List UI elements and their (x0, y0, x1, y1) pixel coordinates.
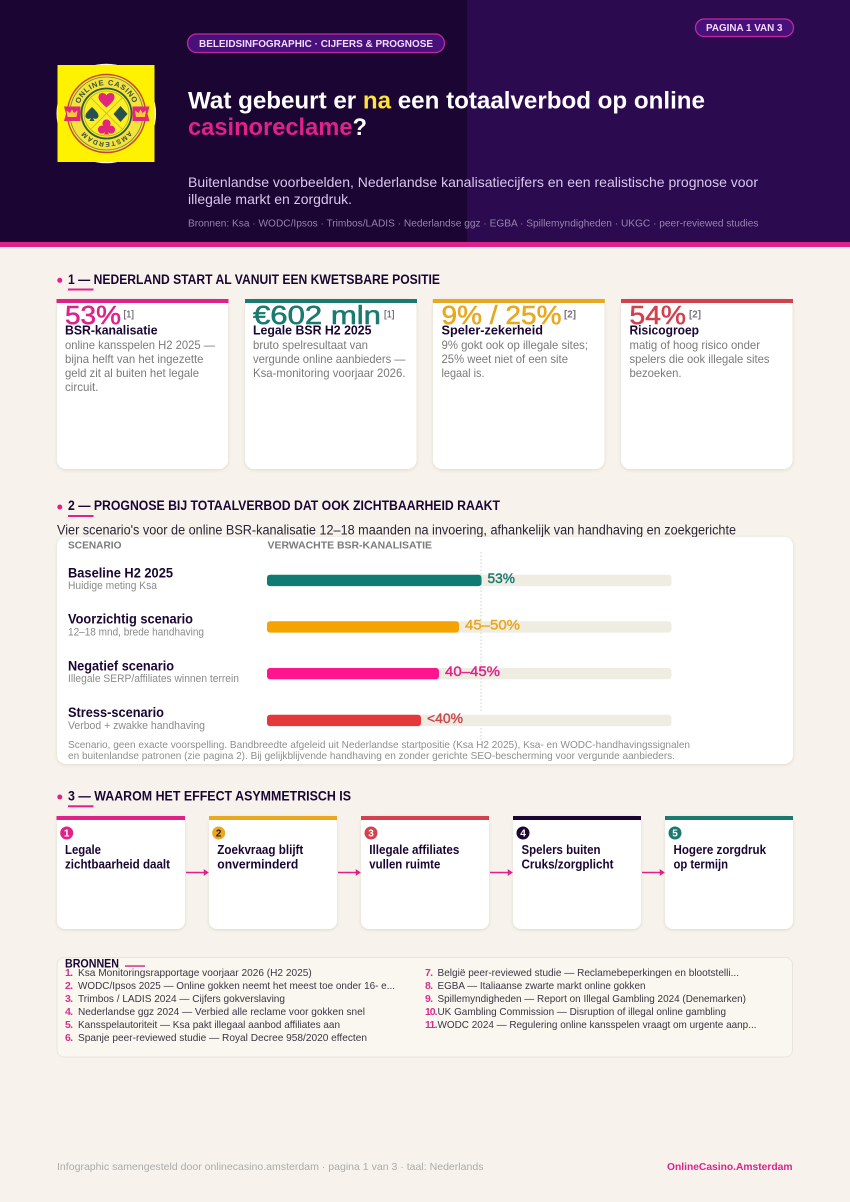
subtitle (188, 174, 758, 207)
step 1: Legale (65, 842, 101, 857)
row: stress: <40% (427, 711, 463, 726)
row: baseline: Baseline H2 2025 (68, 565, 173, 580)
step 3: Illegale affiliates (369, 842, 459, 857)
row: voorzichtig (68, 612, 520, 638)
row: voorzichtig: 45–50% (465, 617, 520, 632)
step 3: 3 (368, 829, 374, 840)
row: baseline: Huidige meting Ksa (68, 580, 158, 592)
step 4: 4 (520, 829, 526, 840)
footer: Infographic samengesteld door onlinecasino.amsterdam · pagina 1 van 3 · taal: Nederlands (57, 1161, 484, 1173)
card: €602 mln: Ksa-monitoring voorjaar 2026. (253, 366, 406, 380)
bronnen list right: 7. (425, 967, 433, 979)
card: 53% (56, 299, 228, 469)
bronnen list left: 1. (65, 967, 73, 979)
bronnen list left: 4. (65, 1006, 73, 1018)
card: 54%: 54% (630, 300, 686, 330)
step 4 (513, 816, 641, 929)
bronnen list right: WODC 2024 — Regulering online kansspelen vraagt om urgente aanp... (438, 1019, 756, 1031)
subtitle: Buitenlandse voorbeelden, Nederlandse kanalisatiecijfers en een realistische prognose voor (188, 174, 758, 190)
card: 53%: 53% (65, 300, 121, 330)
step 5 (665, 816, 793, 929)
bronnen list left: WODC/Ipsos 2025 — Online gokken neemt het meest toe onder 16- e... (78, 980, 395, 992)
bronnen list left: Ksa Monitoringsrapportage voorjaar 2026 (H2 2025) (78, 967, 312, 979)
arrow: 2 to 3 (338, 870, 360, 874)
row: stress: Verbod + zwakke handhaving (68, 720, 205, 732)
tag: pagina 1 van 3 (696, 19, 794, 36)
step 2: 2 (216, 829, 222, 840)
card: 9% / 25% (433, 299, 605, 469)
footer (57, 1161, 792, 1173)
card: 54%: matig of hoog risico onder (630, 338, 760, 352)
card: 54% (621, 299, 793, 469)
row: voorzichtig: Voorzichtig scenario (68, 612, 193, 626)
card: 53%: [1] (124, 310, 134, 320)
panel: scenario bar chart (57, 537, 793, 764)
bronnen list right (425, 967, 756, 1031)
logo: online casino amsterdam: ONLINE CASINO (76, 80, 137, 103)
row: voorzichtig: 12–18 mnd, brede handhaving (68, 626, 204, 638)
step 2: onverminderd (217, 857, 298, 872)
card: €602 mln: Legale BSR H2 2025 (253, 322, 372, 338)
bronnen list left: 3. (65, 993, 73, 1005)
step 3: vullen ruimte (369, 857, 440, 872)
card: €602 mln: bruto spelresultaat van (253, 338, 368, 352)
bronnen list left: Nederlandse ggz 2024 — Verbied alle reclame voor gokken snel (78, 1006, 365, 1018)
card: 9% / 25%: Speler-zekerheid (442, 322, 543, 338)
bronnen list right: EGBA — Italiaanse zwarte markt online gokken (438, 980, 646, 992)
panel: bronnen (57, 956, 792, 1057)
step 3 (361, 816, 489, 929)
bronnen list right: UK Gambling Commission — Disruption of illegal online gambling (438, 1006, 726, 1018)
card: 53%: bijna helft van het ingezette (65, 352, 204, 366)
step 4: Cruks/zorgplicht (522, 857, 614, 872)
bronnen list left: 5. (65, 1019, 73, 1031)
subtitle: illegale markt en zorgdruk. (188, 191, 352, 207)
header banner (0, 0, 850, 247)
card: 9% / 25%: 9% gokt ook op illegale sites; (442, 338, 588, 352)
bronnen heading: BRONNEN (65, 956, 119, 970)
step 4: Spelers buiten (522, 842, 601, 857)
sources line: Bronnen: Ksa · WODC/Ipsos · Trimbos/LADIS · Nederlandse ggz · EGBA · Spillemyndigheden · UKGC · peer-reviewed studies (188, 218, 758, 230)
bronnen list right: 11. (425, 1019, 438, 1031)
heading: section 3: 3 — WAAROM HET EFFECT ASYMMETRISCH IS (68, 788, 351, 804)
icon: club (98, 119, 115, 134)
card: 53%: BSR-kanalisatie (65, 322, 158, 338)
step 1 (56, 816, 185, 929)
row: negatief: Illegale SERP/affiliates winnen terrein (68, 673, 239, 685)
chart column headers (68, 539, 432, 551)
card: 9% / 25%: legaal is. (442, 366, 484, 380)
bronnen list left: Spanje peer-reviewed studie — Royal Decree 958/2020 effecten (78, 1032, 367, 1044)
card: 54%: Risicogroep (630, 322, 699, 338)
bronnen list left (65, 967, 395, 1044)
row: baseline (68, 565, 515, 592)
step 2 (209, 816, 337, 929)
bronnen list left: Kansspelautoriteit — Ksa pakt illegaal aanbod affiliates aan (78, 1019, 340, 1031)
title (188, 88, 705, 141)
chart column headers: SCENARIO (68, 539, 122, 551)
chart footnote: en buitenlandse patronen (zie pagina 2). Bij gelijkblijvende handhaving en zonder gerichte SEO-bescherming voor vergunde aanbieders. (68, 750, 675, 762)
card: 54%: bezoeken. (630, 366, 682, 380)
tag: pagina 1 van 3: PAGINA 1 VAN 3 (706, 22, 783, 34)
row: stress (68, 705, 463, 732)
heading: section 1: 1 — NEDERLAND START AL VANUIT EEN KWETSBARE POSITIE (68, 272, 440, 287)
step 5: Hogere zorgdruk (674, 842, 767, 857)
row: baseline: 53% (488, 571, 515, 586)
panel: stat cards (56, 299, 793, 469)
card: €602 mln (245, 299, 417, 469)
title: Wat gebeurt er na een totaalverbod op online (188, 88, 705, 114)
arrow: 1 to 2 (186, 870, 208, 874)
logo: online casino amsterdam: AMSTERDAM (81, 131, 132, 147)
bronnen list left: 2. (65, 980, 73, 992)
card: €602 mln: vergunde online aanbieders — (253, 352, 406, 366)
card: 54%: spelers die ook illegale sites (630, 352, 770, 366)
step 2: Zoekvraag blijft (217, 842, 304, 857)
card: €602 mln: €602 mln (253, 300, 381, 330)
tag: beleidsinfographic (188, 34, 444, 52)
chart column headers: VERWACHTE BSR-KANALISATIE (268, 539, 432, 551)
row: negatief: 40–45% (445, 664, 500, 679)
card: 9% / 25%: 9% / 25% (442, 300, 562, 330)
step 1: 1 (64, 829, 70, 840)
chart footnote (68, 739, 690, 762)
panel: causal chain (56, 816, 793, 929)
row: negatief: Negatief scenario (68, 658, 174, 673)
icon: spade (86, 107, 98, 121)
step 5: 5 (672, 829, 678, 840)
bronnen list left: Trimbos / LADIS 2024 — Cijfers gokverslaving (78, 993, 285, 1005)
bronnen list left: 6. (65, 1032, 73, 1044)
bronnen list right: 9. (425, 993, 433, 1005)
chart footnote: Scenario, geen exacte voorspelling. Bandbreedte afgeleid uit Nederlandse startpositie (Ksa H2 2025), Ksa- en WODC-handhavingssignalen (68, 739, 690, 751)
card: 53%: online kansspelen H2 2025 — (65, 338, 215, 352)
card: 9% / 25%: 25% weet niet of een site (442, 352, 568, 366)
bronnen list right: 8. (425, 980, 433, 992)
arrow: 3 to 4 (490, 870, 512, 874)
arrow: 4 to 5 (642, 870, 664, 874)
card: 54%: [2] (689, 310, 701, 320)
bronnen list right: Spillemyndigheden — Report on Illegal Gambling 2024 (Denemarken) (438, 993, 746, 1005)
card: 53%: geld zit al buiten het legale (65, 366, 199, 380)
icon: heart (98, 93, 114, 108)
heading: section 2: 2 — PROGNOSE BIJ TOTAALVERBOD DAT OOK ZICHTBAARHEID RAAKT (68, 498, 501, 513)
step 5: op termijn (674, 857, 728, 872)
bar tracks (267, 575, 672, 726)
card: 53%: circuit. (65, 380, 98, 394)
card: €602 mln: [1] (384, 310, 394, 320)
row: stress: Stress-scenario (68, 705, 164, 720)
section 2 intro: Vier scenario's voor de online BSR-kanalisatie 12–18 maanden na invoering, afhankelijk van handhaving en zoekgerichte (57, 522, 736, 538)
bronnen list right: België peer-reviewed studie — Reclamebeperkingen en blootstelli... (438, 967, 739, 979)
row: negatief (68, 658, 500, 685)
icon: ribbons and crowns (64, 106, 150, 121)
icon: diamond (114, 106, 128, 122)
tag: beleidsinfographic: BELEIDSINFOGRAPHIC · CIJFERS & PROGNOSE (199, 38, 433, 50)
step 1: zichtbaarheid daalt (65, 857, 171, 872)
bronnen list right: 10. (425, 1006, 438, 1018)
footer: OnlineCasino.Amsterdam (667, 1161, 792, 1173)
card: 9% / 25%: [2] (564, 310, 576, 320)
title: casinoreclame? (188, 114, 367, 141)
logo: online casino amsterdam (56, 64, 156, 164)
